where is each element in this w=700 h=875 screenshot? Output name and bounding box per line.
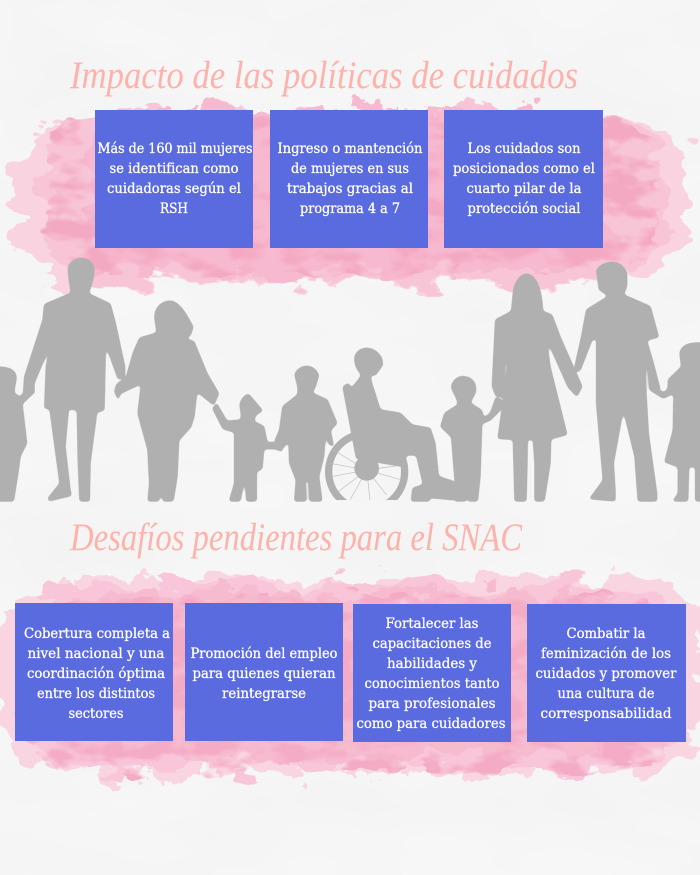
- card: programa 4 a 7: programa 4 a 7: [300, 201, 400, 217]
- silhouettes: right group: [329, 262, 700, 510]
- watercolor blob: top: [10, 112, 690, 282]
- woman: [114, 301, 219, 502]
- card: feminización: Combatir la: [566, 626, 646, 642]
- card: cuarto pilar: Los cuidados son: [468, 141, 580, 157]
- card: cobertura: entre los distintos: [37, 686, 155, 702]
- card: capacitaciones: para profesionales: [368, 696, 496, 712]
- wheelchair wheel: [329, 434, 405, 510]
- card: mujeres cuidadoras: RSH: [160, 201, 188, 217]
- girl at right edge: [649, 342, 700, 502]
- card: feminización: [527, 604, 686, 742]
- card: capacitaciones: conocimientos tanto: [364, 676, 500, 692]
- card: capacitaciones: [353, 604, 511, 742]
- panel: impact cards: [95, 110, 603, 248]
- card: cobertura: [15, 603, 173, 741]
- card: cobertura: coordinación óptima: [27, 666, 165, 682]
- card: cuarto pilar: posicionados como el: [453, 161, 595, 177]
- card: programa 4 a 7: trabajos gracias al: [287, 181, 413, 197]
- card: feminización: una cultura de: [558, 686, 654, 702]
- title: impacto: Impacto de las políticas de cuidados: [69, 54, 578, 97]
- card: programa 4 a 7: de mujeres en sus: [291, 161, 409, 177]
- card: capacitaciones: Fortalecer las: [386, 616, 478, 632]
- boy: [274, 366, 338, 502]
- title: desafíos: Desafíos pendientes para el SNAC: [69, 516, 523, 559]
- boy beside wheelchair: [440, 376, 503, 502]
- card: capacitaciones: capacitaciones de: [372, 636, 492, 652]
- card: mujeres cuidadoras: se identifican como: [110, 161, 238, 177]
- card: feminización: corresponsabilidad: [540, 706, 672, 722]
- card: capacitaciones: como para cuidadores: [356, 716, 506, 732]
- woman in dress: [492, 273, 583, 502]
- panel: challenge cards: [15, 603, 686, 742]
- card: cobertura: sectores: [68, 706, 124, 722]
- card: capacitaciones: habilidades y: [387, 656, 477, 672]
- child at left edge: [0, 366, 34, 502]
- card: empleo: [185, 603, 343, 741]
- small child: [212, 394, 283, 502]
- card: cuarto pilar: [444, 110, 603, 248]
- card: cobertura: nivel nacional y una: [28, 646, 164, 662]
- card: feminización: cuidados y promover: [536, 666, 677, 682]
- card: programa 4 a 7: [270, 110, 428, 248]
- person in wheelchair: [342, 348, 467, 502]
- card: empleo: reintegrarse: [222, 686, 306, 702]
- tall man: [23, 258, 125, 502]
- card: empleo: Promoción del empleo: [190, 646, 338, 662]
- card: feminización: feminización de los: [541, 646, 671, 662]
- silhouettes: left group: [0, 258, 338, 502]
- man right: [573, 262, 661, 502]
- card: cobertura: Cobertura completa a: [24, 626, 170, 642]
- card: cuarto pilar: protección social: [468, 201, 581, 217]
- card: empleo: para quienes quieran: [192, 666, 336, 682]
- card: mujeres cuidadoras: [95, 110, 253, 248]
- card: mujeres cuidadoras: Más de 160 mil mujeres: [98, 141, 252, 157]
- card: cuarto pilar: cuarto pilar de la: [466, 181, 582, 197]
- card: mujeres cuidadoras: cuidadoras según el: [107, 181, 241, 197]
- card: programa 4 a 7: Ingreso o mantención: [278, 141, 422, 157]
- watercolor blob: bottom: [0, 580, 700, 772]
